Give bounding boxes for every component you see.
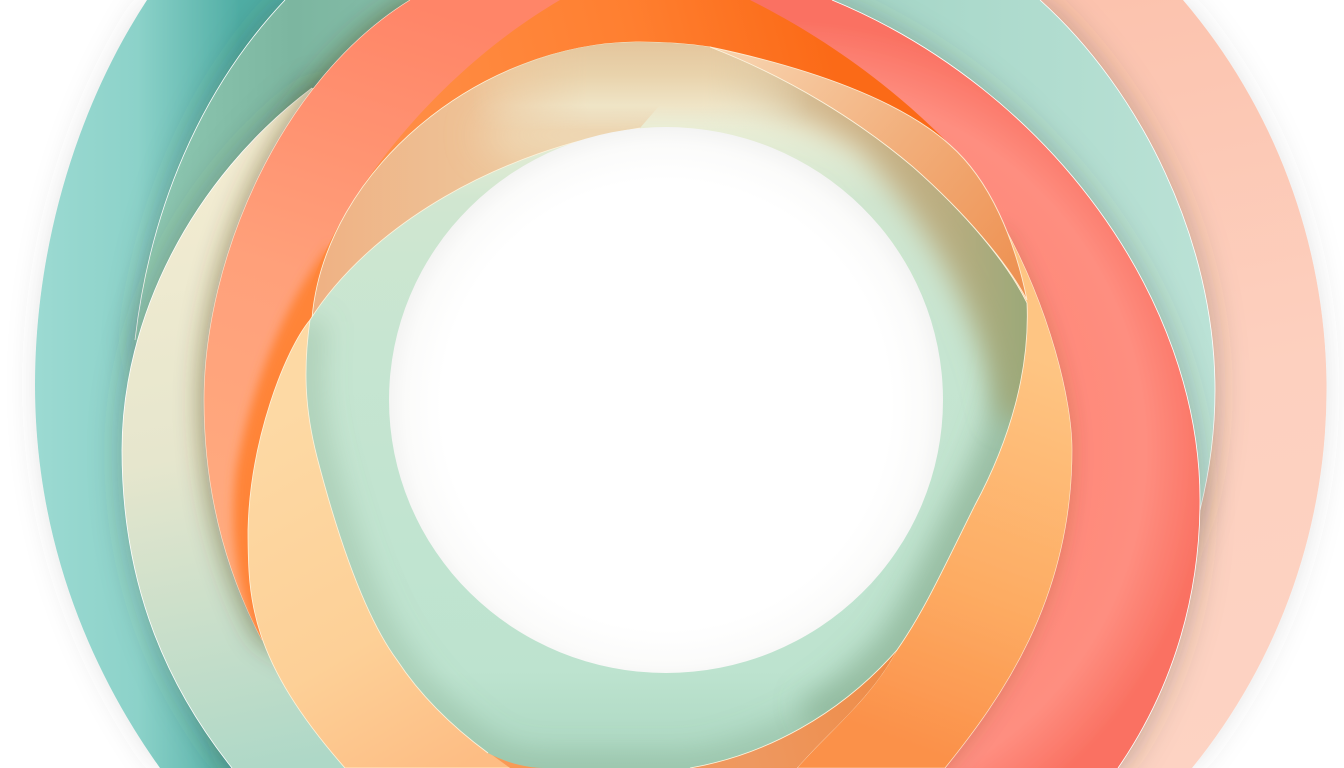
band: mint ring [306,20,1060,768]
tan ring cream glow [486,112,648,161]
red edge highlight [832,0,1200,768]
band: red right [700,0,1200,768]
mint ring edge shading [306,303,1027,768]
band: outer peach [700,0,1327,768]
centre circle [389,127,943,673]
band: light orange left [248,320,620,768]
mint ring edge highlight [306,47,1027,768]
cream edge highlight [122,88,312,768]
band: orange strand [710,47,1027,300]
coral edge highlight [204,0,410,640]
seam blend at top of ring [492,42,780,124]
band: coral left [204,0,700,768]
back mint edge highlight [135,0,1215,510]
band: cream [122,88,600,768]
band: bottom orange strip [488,650,897,768]
band: light orange right [797,226,1072,768]
mint ring right side shading [800,394,1013,724]
band: tan ring [312,42,710,500]
band: deep orange lower left [228,244,328,640]
band: outer teal [35,0,500,768]
band: deep orange top [300,0,945,400]
mint ring top right tan shading [718,51,1027,430]
